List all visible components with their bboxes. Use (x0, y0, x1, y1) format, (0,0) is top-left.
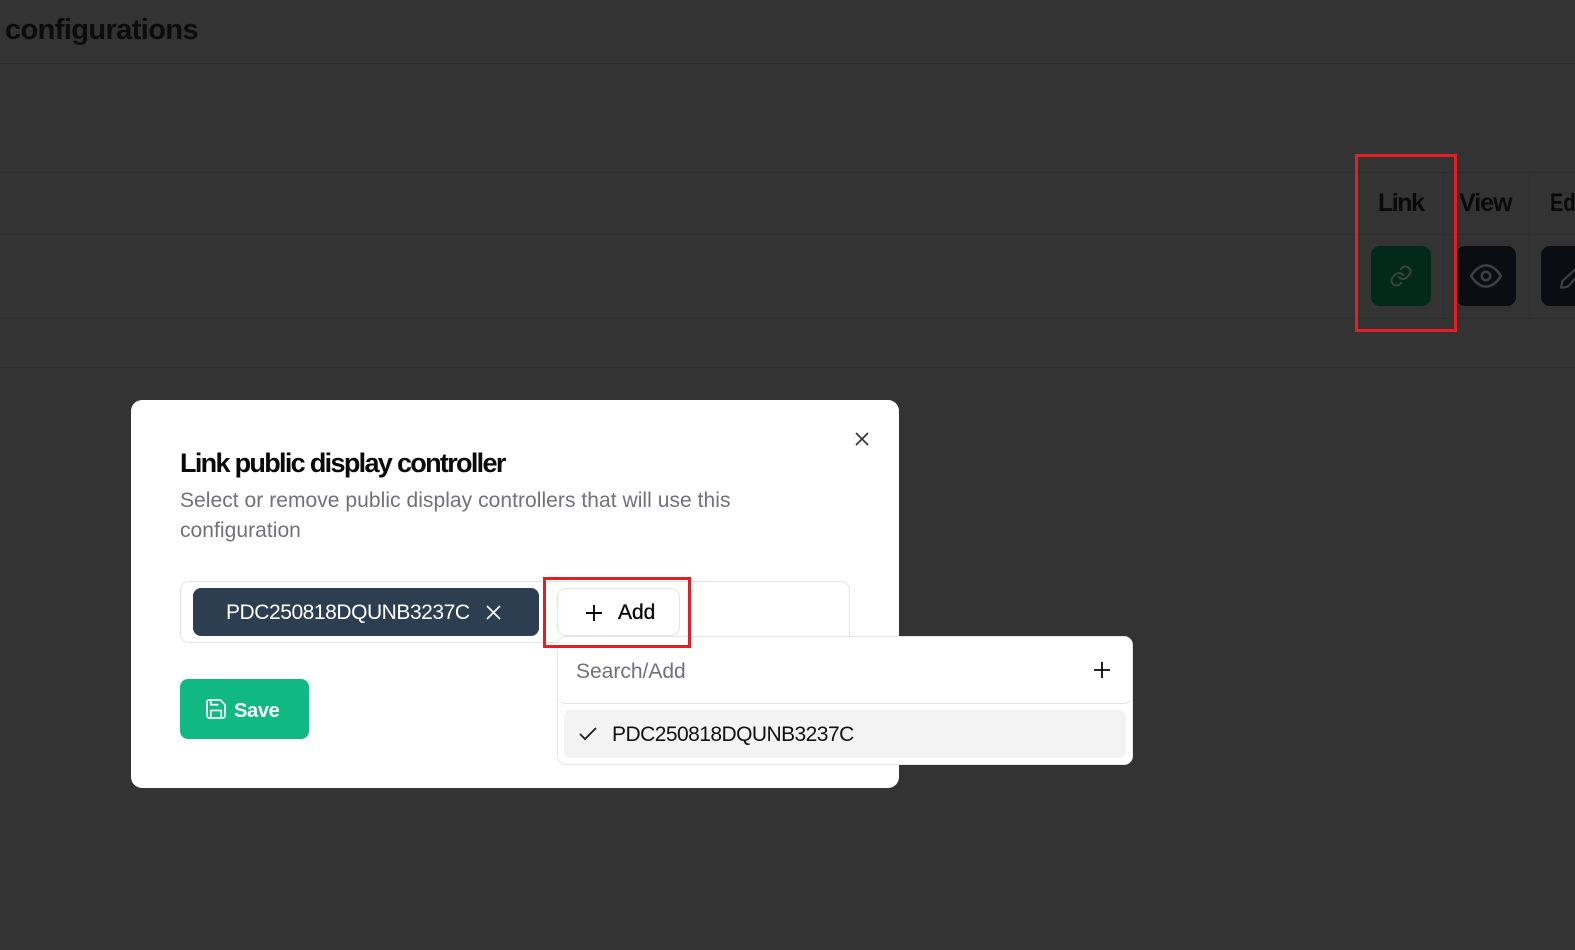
modal close icon (856, 432, 868, 446)
icon: eye (1470, 264, 1502, 288)
modal description: Select or remove public display controllers that will use this (180, 489, 731, 512)
view button (1456, 246, 1516, 306)
highlight: add button (543, 577, 691, 648)
save label: Save (234, 700, 280, 722)
dropdown panel (557, 636, 1133, 765)
highlight: link column (1355, 154, 1457, 332)
edit button (1541, 246, 1575, 306)
icon: check (579, 727, 597, 740)
option label: PDC250818DQUNB3237C (612, 723, 854, 746)
selection box (180, 581, 850, 643)
icon: plus (586, 605, 602, 621)
icon: save (206, 699, 226, 719)
column header: Edit: Ed (1550, 189, 1575, 217)
column header: View: View (1459, 189, 1512, 217)
icon: plus (1094, 662, 1110, 678)
modal dialog (131, 400, 899, 788)
link button (1371, 246, 1431, 306)
dropdown option (564, 710, 1126, 758)
column header: Link: Link (1378, 189, 1423, 217)
search placeholder: Search/Add (576, 660, 686, 683)
save button (180, 679, 309, 739)
chip label: PDC250818DQUNB3237C (226, 601, 470, 624)
add button (557, 588, 680, 636)
chip remove icon (486, 605, 500, 620)
icon: pencil (1560, 268, 1575, 289)
modal description: configuration (180, 519, 301, 542)
add label: Add (618, 601, 655, 624)
selected controller chip (193, 588, 539, 636)
modal description (180, 489, 731, 542)
modal title: Link public display controller (180, 448, 505, 478)
icon: link (1390, 266, 1412, 286)
page heading: configurations (5, 14, 198, 46)
search row (557, 636, 1133, 704)
